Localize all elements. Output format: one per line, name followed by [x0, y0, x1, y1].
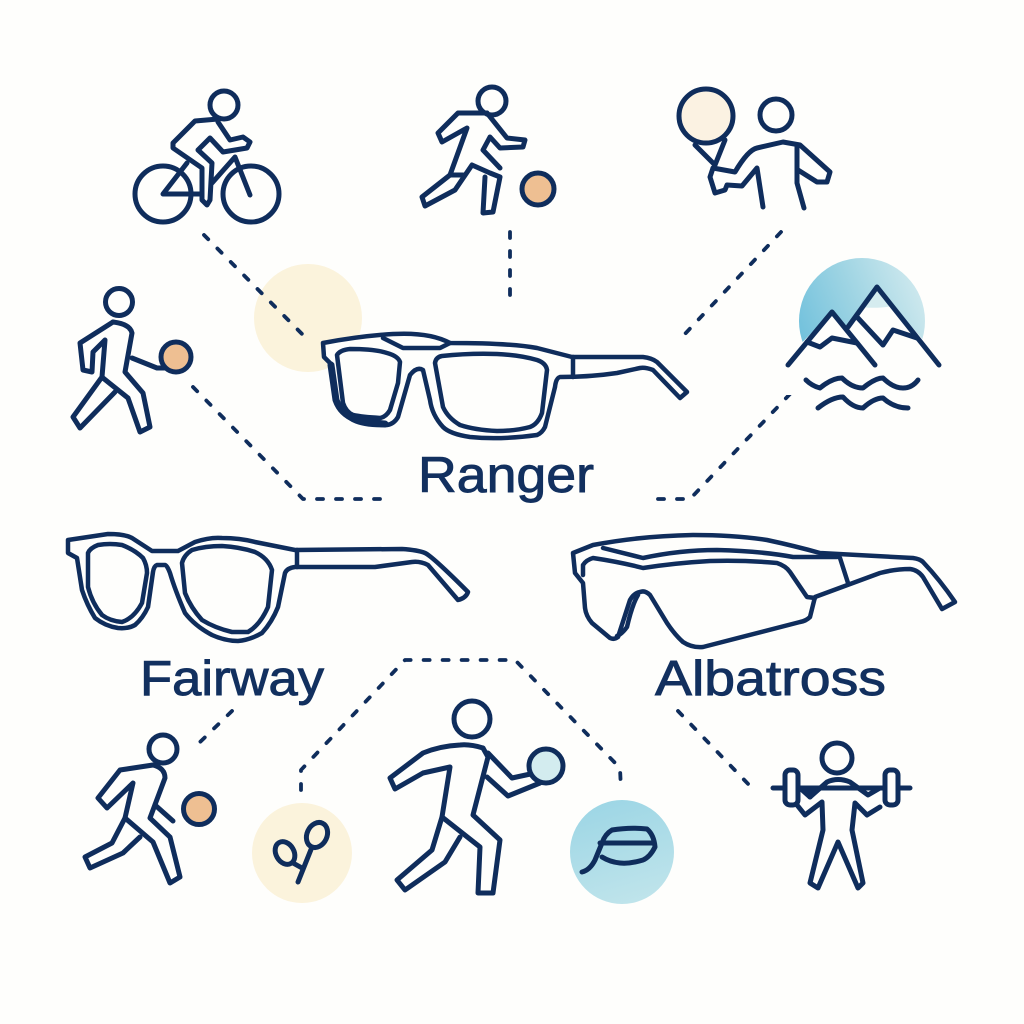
icon: large player: [390, 701, 563, 893]
icon: runner with ball lower left: [85, 735, 214, 883]
sky circle: [799, 258, 925, 384]
icon: cap circle: [570, 800, 674, 904]
label: Ranger: Ranger: [418, 447, 594, 503]
ball: [522, 173, 554, 205]
racket head: [679, 89, 733, 143]
glasses: Albatross: [573, 535, 955, 647]
icon: weightlifter: [773, 743, 910, 888]
icon: walker with ball: [73, 288, 191, 432]
icon: tennis player: [679, 89, 830, 208]
icon: mountain and waves: [780, 258, 945, 408]
ball: [161, 342, 191, 372]
ball: [184, 794, 214, 824]
icon: badminton circle: [252, 803, 352, 903]
icon: cyclist: [135, 91, 279, 222]
ball: [529, 749, 563, 783]
decorative circle: cream behind Ranger: [254, 264, 362, 372]
glasses: Fairway: [68, 534, 468, 641]
glasses: Ranger: [323, 334, 687, 438]
icon: runner with ball: [422, 87, 554, 213]
label: Albatross: Albatross: [655, 652, 886, 706]
dashed connector lines: [193, 232, 790, 790]
label: Fairway: Fairway: [140, 652, 325, 706]
